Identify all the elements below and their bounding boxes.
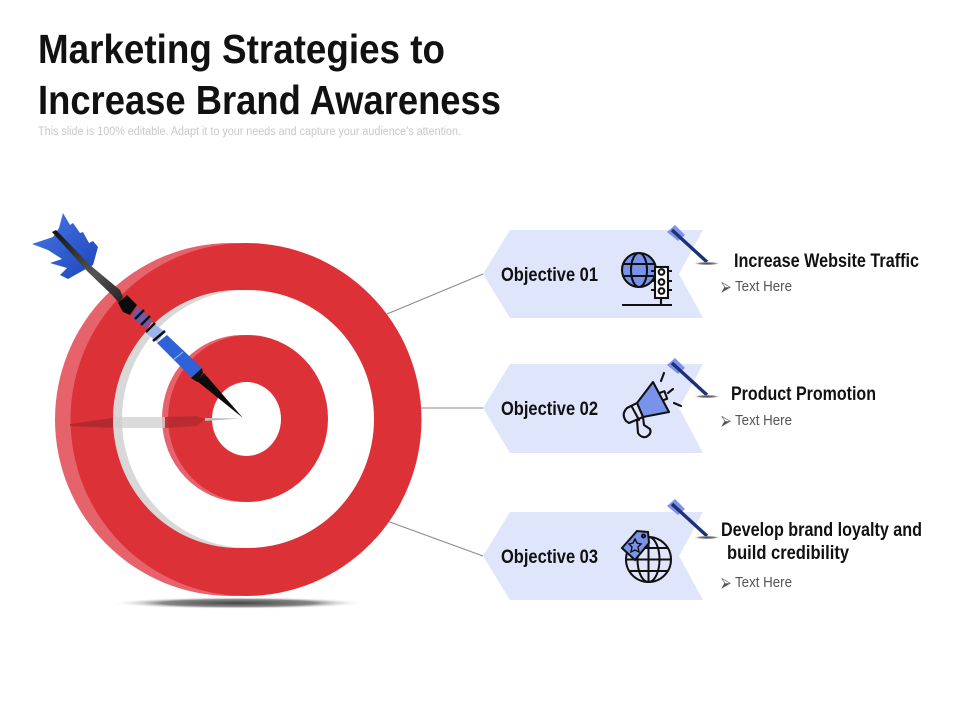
text block: develop brand loyalty: ⮚ [721, 574, 731, 590]
title [38, 26, 501, 123]
subtitle: This slide is 100% editable. Adapt it to your needs and capture your audience’s attention. [38, 126, 461, 138]
text block: increase website traffic [721, 251, 919, 295]
icon: pin [667, 225, 721, 265]
dart [32, 213, 243, 418]
label: Objective 01 [501, 265, 598, 286]
text block: increase website traffic: ⮚ [721, 278, 731, 294]
title: Increase Brand Awareness [38, 77, 501, 123]
panel: objective 02 [483, 364, 703, 453]
text block: product promotion: Product Promotion [731, 384, 876, 405]
flight [32, 213, 98, 279]
dart shadow [70, 416, 240, 428]
panel: objective 03 [483, 512, 703, 600]
text block: increase website traffic: Increase Website Traffic [734, 251, 919, 272]
target shadow [110, 597, 366, 609]
icon: pin [667, 499, 721, 539]
text block: develop brand loyalty: Text Here [735, 574, 792, 591]
target board [55, 243, 422, 596]
objective 02 [483, 358, 721, 453]
tip [197, 373, 243, 418]
title: Marketing Strategies to [38, 26, 445, 72]
label: Objective 03 [501, 547, 598, 568]
text block: product promotion [721, 384, 876, 429]
icon: globe and tag [622, 531, 671, 582]
text block: product promotion: Text Here [735, 412, 792, 429]
objective 01 [483, 225, 721, 318]
barrel rings [132, 307, 152, 328]
objective 03 [483, 499, 721, 600]
text block: increase website traffic: Text Here [735, 278, 792, 295]
icon: pin [667, 358, 721, 398]
text block: develop brand loyalty: Develop brand loyalty and [721, 520, 922, 541]
text block: develop brand loyalty: build credibility [727, 543, 849, 564]
text block: develop brand loyalty [721, 520, 922, 591]
connector lines [387, 274, 483, 556]
label: Objective 02 [501, 399, 598, 420]
icon: megaphone [624, 373, 681, 437]
barrel [157, 335, 202, 378]
panel: objective 01 [483, 230, 703, 318]
text block: product promotion: ⮚ [721, 412, 731, 428]
icon: globe and traffic light [622, 253, 672, 305]
shaft [52, 230, 123, 303]
